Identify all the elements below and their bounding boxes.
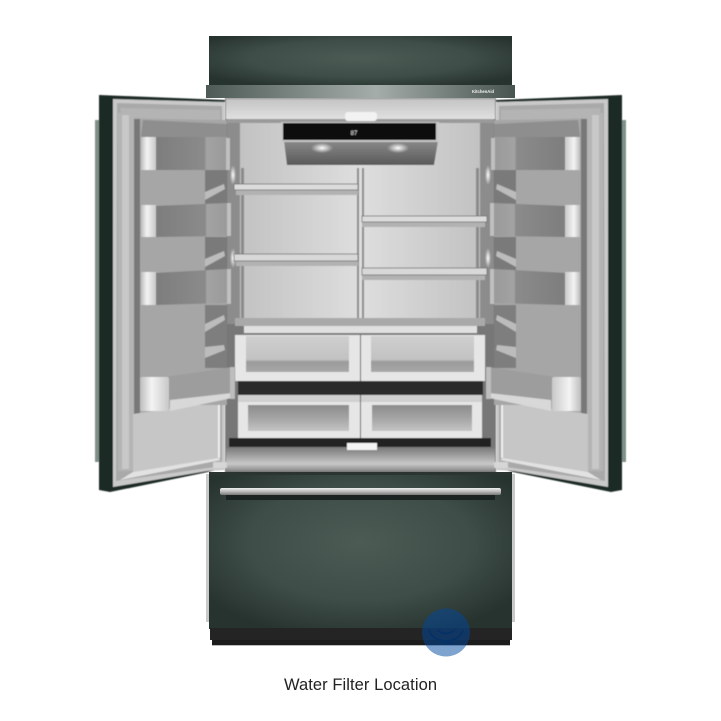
display reading: 87	[351, 131, 358, 137]
top grille panel	[209, 36, 512, 86]
icon: water filter	[429, 630, 463, 644]
bracket 1	[205, 170, 227, 205]
door liner column	[118, 113, 134, 471]
lower door panel	[133, 402, 218, 472]
control panel lights	[311, 143, 409, 153]
toe kick	[210, 628, 512, 646]
fridge floor	[226, 447, 495, 471]
top door shelf	[141, 120, 227, 137]
back wall	[240, 123, 480, 323]
lower gap	[229, 438, 491, 447]
water filter highlight circle	[422, 608, 470, 656]
lower drawers	[238, 395, 482, 439]
left shelves	[234, 184, 358, 266]
door bin 4	[140, 367, 235, 411]
shelf rails	[241, 168, 479, 318]
bin wall	[140, 120, 227, 405]
door hinge	[213, 462, 227, 468]
right door	[486, 95, 626, 492]
caption: Water Filter Location	[284, 676, 437, 694]
door frame	[113, 99, 225, 487]
left door	[95, 95, 235, 492]
bracket 3	[205, 305, 227, 368]
bracket 2	[205, 237, 227, 272]
floor clip	[347, 443, 377, 450]
door bin 3	[141, 269, 231, 305]
top trim band	[206, 85, 515, 98]
door outer edge	[99, 95, 225, 492]
drawer gap	[238, 381, 483, 395]
side walls	[227, 119, 494, 324]
brand logo: KitchenAid	[472, 89, 494, 94]
refrigerator interior	[225, 98, 496, 474]
control panel	[281, 122, 439, 165]
door handle	[220, 488, 501, 500]
ceiling clip	[345, 112, 377, 121]
bottom freezer door	[206, 472, 515, 629]
door gasket top	[120, 108, 220, 120]
ceiling band	[226, 99, 495, 119]
upper drawers	[235, 335, 485, 395]
door bin 1	[141, 137, 230, 170]
door side panel	[95, 120, 100, 462]
right shelves	[362, 216, 487, 280]
door bin 2	[141, 203, 231, 237]
crisper shelf	[235, 318, 485, 335]
